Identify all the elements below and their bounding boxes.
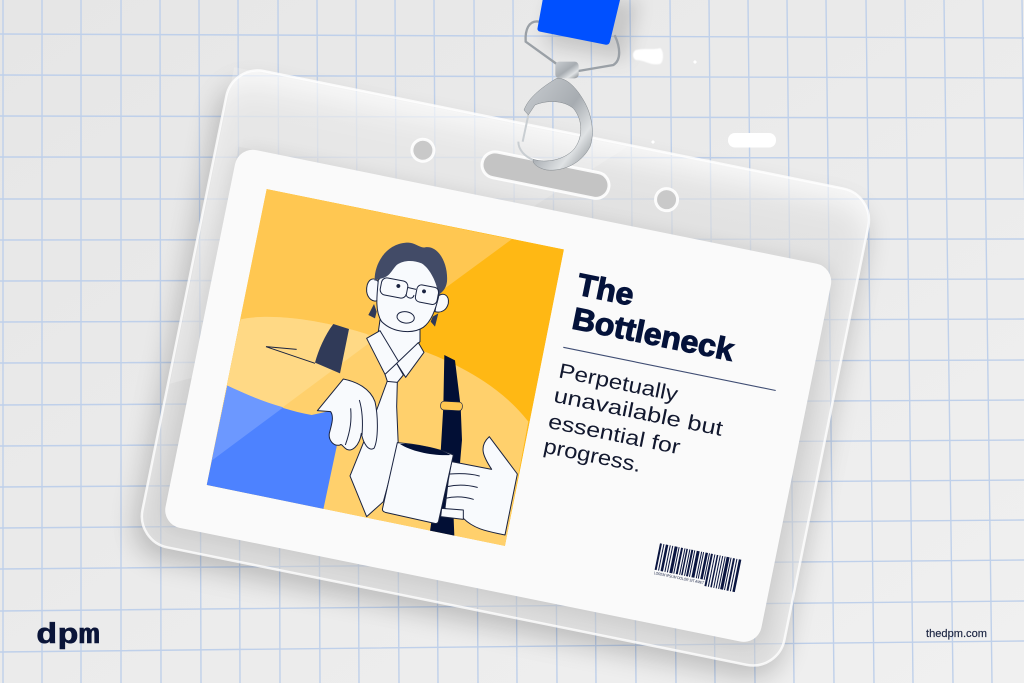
left round hole xyxy=(410,137,436,163)
right ear xyxy=(435,294,448,312)
neck xyxy=(378,320,420,365)
mug handle xyxy=(441,508,463,519)
left suspender xyxy=(315,324,349,373)
holding hand xyxy=(445,437,517,535)
light diagonal xyxy=(212,189,512,460)
illustration background xyxy=(207,189,564,546)
right collar xyxy=(397,343,424,377)
description line 2: unavailable but xyxy=(552,384,725,441)
left collar xyxy=(367,331,401,374)
mouth xyxy=(396,311,415,324)
description line 1: Perpetually xyxy=(557,360,680,406)
eyes xyxy=(396,284,426,293)
tie xyxy=(350,381,398,517)
gate xyxy=(518,115,533,160)
dpm logo: dpm xyxy=(36,619,100,652)
mug opening xyxy=(400,444,451,455)
holder gloss xyxy=(170,67,627,463)
lanyard clip xyxy=(518,0,620,170)
website url: thedpm.com xyxy=(926,628,987,640)
barcode caption: LOREM IPSUM DOLOR SIT AMET xyxy=(654,570,705,585)
face xyxy=(377,260,439,332)
right suspender xyxy=(430,355,462,536)
suspender buckle xyxy=(440,401,463,411)
badge shadow xyxy=(128,78,873,683)
tie knot xyxy=(385,363,403,382)
swivel xyxy=(555,62,579,78)
body mound xyxy=(207,317,528,546)
mug xyxy=(382,443,453,523)
pointing hand xyxy=(317,379,377,450)
wire loop xyxy=(526,21,619,71)
lanyard shadow xyxy=(545,0,640,60)
glare: sparkles xyxy=(651,60,697,144)
sleeve crease xyxy=(266,347,315,363)
glare: pill xyxy=(728,133,776,148)
right round hole xyxy=(654,187,680,213)
glare: upper blob xyxy=(633,48,663,64)
blue lanyard strap xyxy=(537,0,620,45)
light body diagonal xyxy=(212,317,373,460)
description text xyxy=(542,360,725,477)
finger creases xyxy=(345,400,363,445)
plastic badge holder xyxy=(136,65,875,671)
glasses xyxy=(379,277,439,305)
title: The Bottleneck xyxy=(569,267,738,368)
metal clasp xyxy=(524,78,592,170)
white ID card xyxy=(162,147,834,645)
sleeve highlight xyxy=(212,386,283,461)
title line 2: Bottleneck xyxy=(569,301,738,368)
left ear xyxy=(367,279,378,301)
illustration: the bottleneck character xyxy=(200,189,564,546)
title line 1: The xyxy=(574,267,637,312)
fingers xyxy=(445,474,479,499)
barcode xyxy=(653,543,741,592)
slot hole xyxy=(480,150,611,201)
side hair tufts xyxy=(368,304,438,327)
description line 3: essential for xyxy=(546,410,682,459)
hair xyxy=(375,243,447,295)
divider line xyxy=(563,347,776,390)
blue sleeve xyxy=(207,386,337,509)
description line 4: progress. xyxy=(542,435,643,477)
